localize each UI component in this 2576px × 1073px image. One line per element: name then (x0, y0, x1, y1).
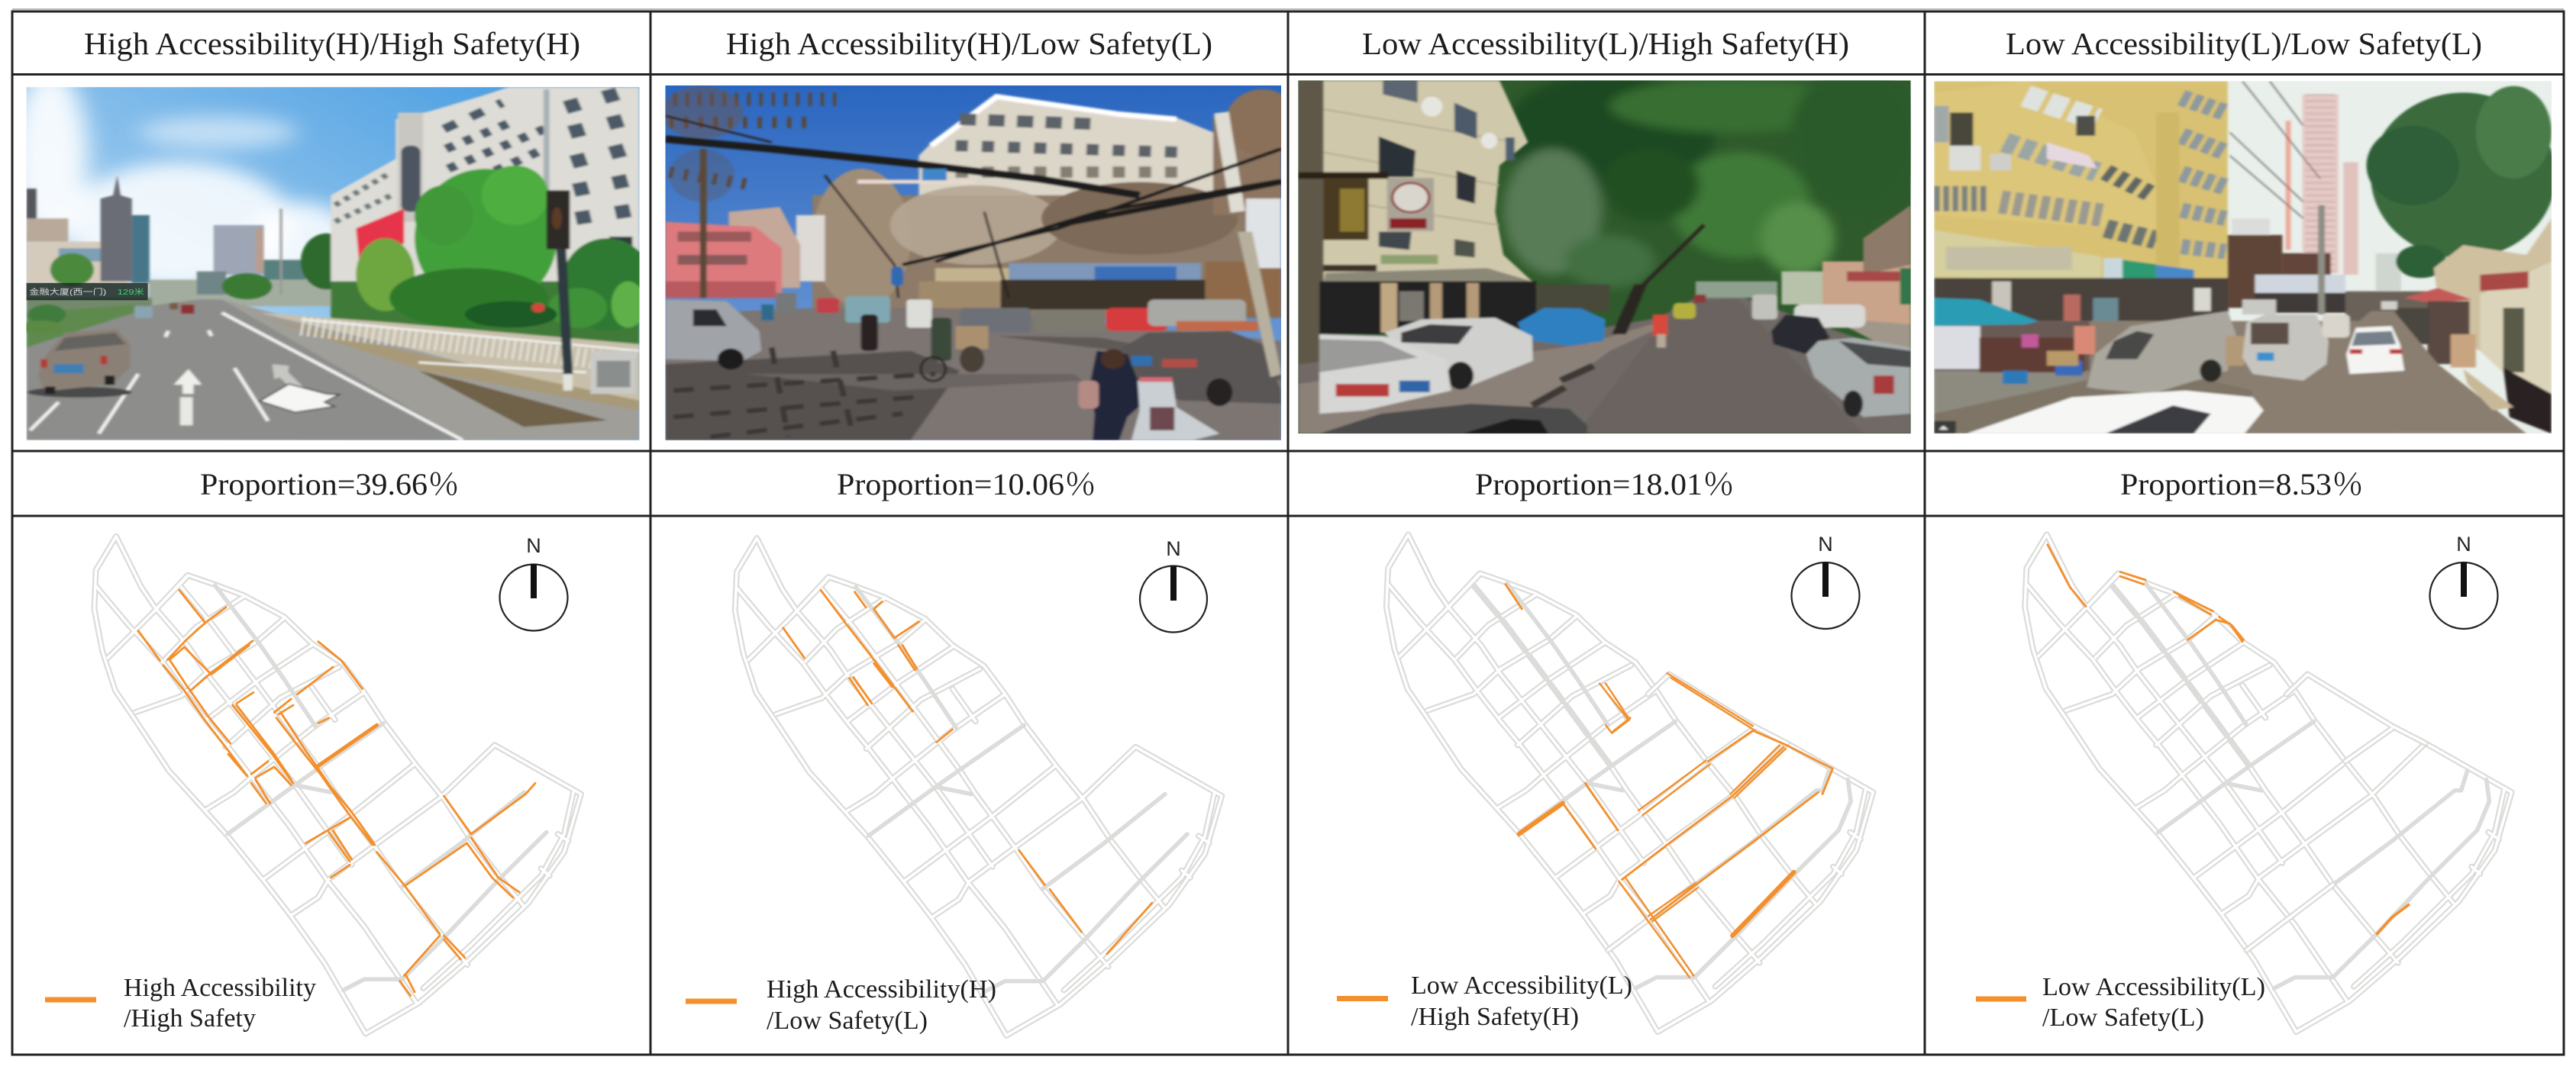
compass (1791, 533, 1860, 629)
building (1298, 80, 1532, 282)
legend (686, 975, 996, 1035)
heading: LH: Low Accessibility(L)/High Safety(H) (1362, 26, 1849, 61)
proportion: HL: Proportion=10.06％ (837, 467, 1096, 501)
far cars (135, 306, 153, 318)
road network (2025, 534, 2512, 1032)
main building (331, 87, 640, 285)
signal (547, 190, 570, 250)
arcade (1324, 268, 1532, 283)
road network (94, 536, 581, 1033)
panel: map HL (686, 537, 1222, 1036)
ground (27, 299, 473, 440)
minivan (2242, 314, 2329, 381)
markings (30, 313, 463, 440)
heading: LL: Low Accessibility(L)/Low Safety(L) (2006, 26, 2482, 61)
photo: wide avenue with high accessibility and high safety (12, 69, 654, 440)
signage band (1934, 230, 2101, 282)
compass (499, 534, 568, 630)
yellow block (1934, 81, 2228, 278)
legend (1337, 972, 1632, 1031)
left buildings (796, 215, 825, 282)
panel: map LH (1337, 533, 1873, 1032)
highlighted streets (783, 590, 1152, 954)
legend (45, 974, 316, 1033)
proportion: LH: Proportion=18.01％ (1475, 467, 1735, 501)
photo: street with shops and yellow apartment block (1934, 81, 2556, 433)
main apartment block (916, 98, 1215, 197)
left skyline (27, 188, 37, 222)
photo: wide avenue with high accessibility and high safety: 金融大厦(西一门) (29, 287, 106, 297)
trees (331, 282, 640, 347)
legend: High Accessibility (124, 974, 316, 1002)
shop band (1009, 263, 1201, 279)
compass: N (2456, 533, 2471, 556)
cyclists (860, 314, 878, 351)
road network (1386, 534, 1873, 1032)
photo: tree-lined street with parked cars (1298, 66, 1921, 433)
fence (302, 326, 640, 364)
proportion: HH: Proportion=39.66％ (200, 467, 460, 501)
trees (812, 195, 1281, 317)
stalls (1934, 321, 2090, 371)
compass (1140, 537, 1207, 632)
foreground white car (1967, 391, 2264, 433)
legend: High Accessibility(H) (767, 975, 996, 1004)
compass: N (526, 534, 541, 557)
woman and stroller (1090, 350, 1141, 440)
parked cars (817, 298, 839, 313)
brick and far building (2228, 235, 2282, 308)
compass: N (1166, 537, 1181, 560)
grey car right (1117, 331, 1281, 404)
legend: /High Safety(H) (1411, 1003, 1579, 1031)
car (27, 387, 132, 398)
pedestrian (1653, 314, 1667, 336)
tree trunk (1612, 285, 1647, 334)
legend: Low Accessibility(L) (1411, 972, 1632, 1000)
tree (2371, 92, 2556, 258)
cables and pole (1222, 112, 1238, 212)
towers (2303, 95, 2339, 273)
legend (1976, 973, 2265, 1032)
road (1934, 321, 2397, 433)
legend: /Low Safety(L) (2042, 1004, 2204, 1032)
parked cars (1518, 308, 1606, 346)
legend: /High Safety (124, 1004, 256, 1033)
compass: N (1818, 533, 1833, 556)
highlighted streets (1506, 585, 1832, 978)
heading: HL: High Accessibility(H)/Low Safety(L) (726, 26, 1212, 61)
shopfronts (1934, 278, 2229, 321)
panel: map HH (45, 534, 581, 1033)
proportion: LL: Proportion=8.53％ (2120, 467, 2364, 501)
road network (735, 538, 1222, 1036)
photo: wide avenue with high accessibility and high safety: 129米 (118, 287, 144, 297)
white car (2346, 326, 2404, 374)
heading: HH: High Accessibility(H)/High Safety(H) (84, 26, 580, 61)
distant buildings (149, 279, 337, 306)
panel: map LL (1976, 533, 2512, 1032)
highlighted streets (138, 590, 535, 996)
road (665, 308, 1281, 440)
ground (1298, 298, 1911, 433)
compass (2429, 533, 2498, 629)
sign and box (1387, 178, 1434, 231)
highlighted streets (2048, 545, 2409, 934)
far end (1822, 262, 1911, 324)
truck (665, 299, 761, 361)
legend: Low Accessibility(L) (2042, 973, 2265, 1001)
van (2087, 311, 2236, 394)
right-hand low houses (2345, 292, 2438, 334)
legend: /Low Safety(L) (767, 1007, 928, 1035)
photo: residential street with overhead cables (661, 85, 1299, 440)
